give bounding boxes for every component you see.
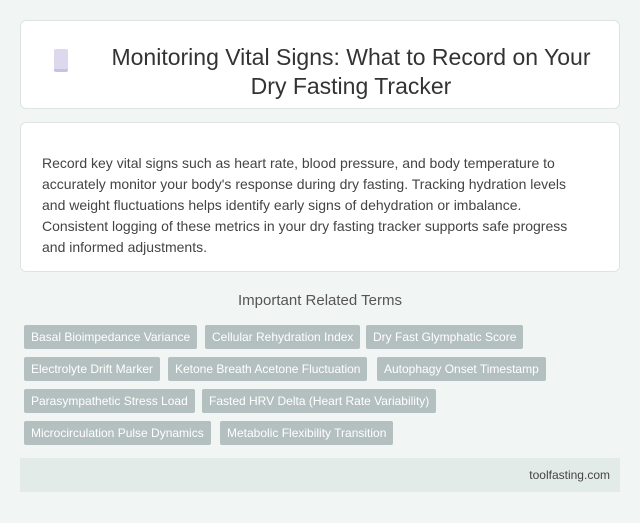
footer: toolfasting.com (529, 468, 610, 482)
icon: document (54, 49, 68, 72)
footer (20, 458, 620, 492)
tags: Electrolyte Drift Marker (31, 362, 153, 376)
tags: Dry Fast Glymphatic Score (373, 330, 516, 344)
tags: Cellular Rehydration Index (212, 330, 353, 344)
tags: Parasympathetic Stress Load (31, 394, 188, 408)
tags: Ketone Breath Acetone Fluctuation (175, 362, 360, 376)
tags: Microcirculation Pulse Dynamics (31, 426, 204, 440)
header card (20, 20, 620, 109)
tags: Basal Bioimpedance Variance (31, 330, 190, 344)
title: Monitoring Vital Signs: What to Record on Your Dry Fasting Tracker (111, 44, 590, 99)
text block (20, 122, 620, 272)
tags: Fasted HRV Delta (Heart Rate Variability) (209, 394, 429, 408)
tags: Autophagy Onset Timestamp (384, 362, 539, 376)
tags: Metabolic Flexibility Transition (227, 426, 386, 440)
heading: related terms: Important Related Terms (238, 292, 402, 309)
text block: Record key vital signs such as heart rate, blood pressure, and body temperature to accurately monitor your body's response during dry fasting. Tracking hydration levels and weight fluctuations helps identify early signs of dehydration or imbalance. Consistent logging of these metrics in your dry fasting tracker supports safe progress and informed adjustments. (42, 155, 567, 255)
